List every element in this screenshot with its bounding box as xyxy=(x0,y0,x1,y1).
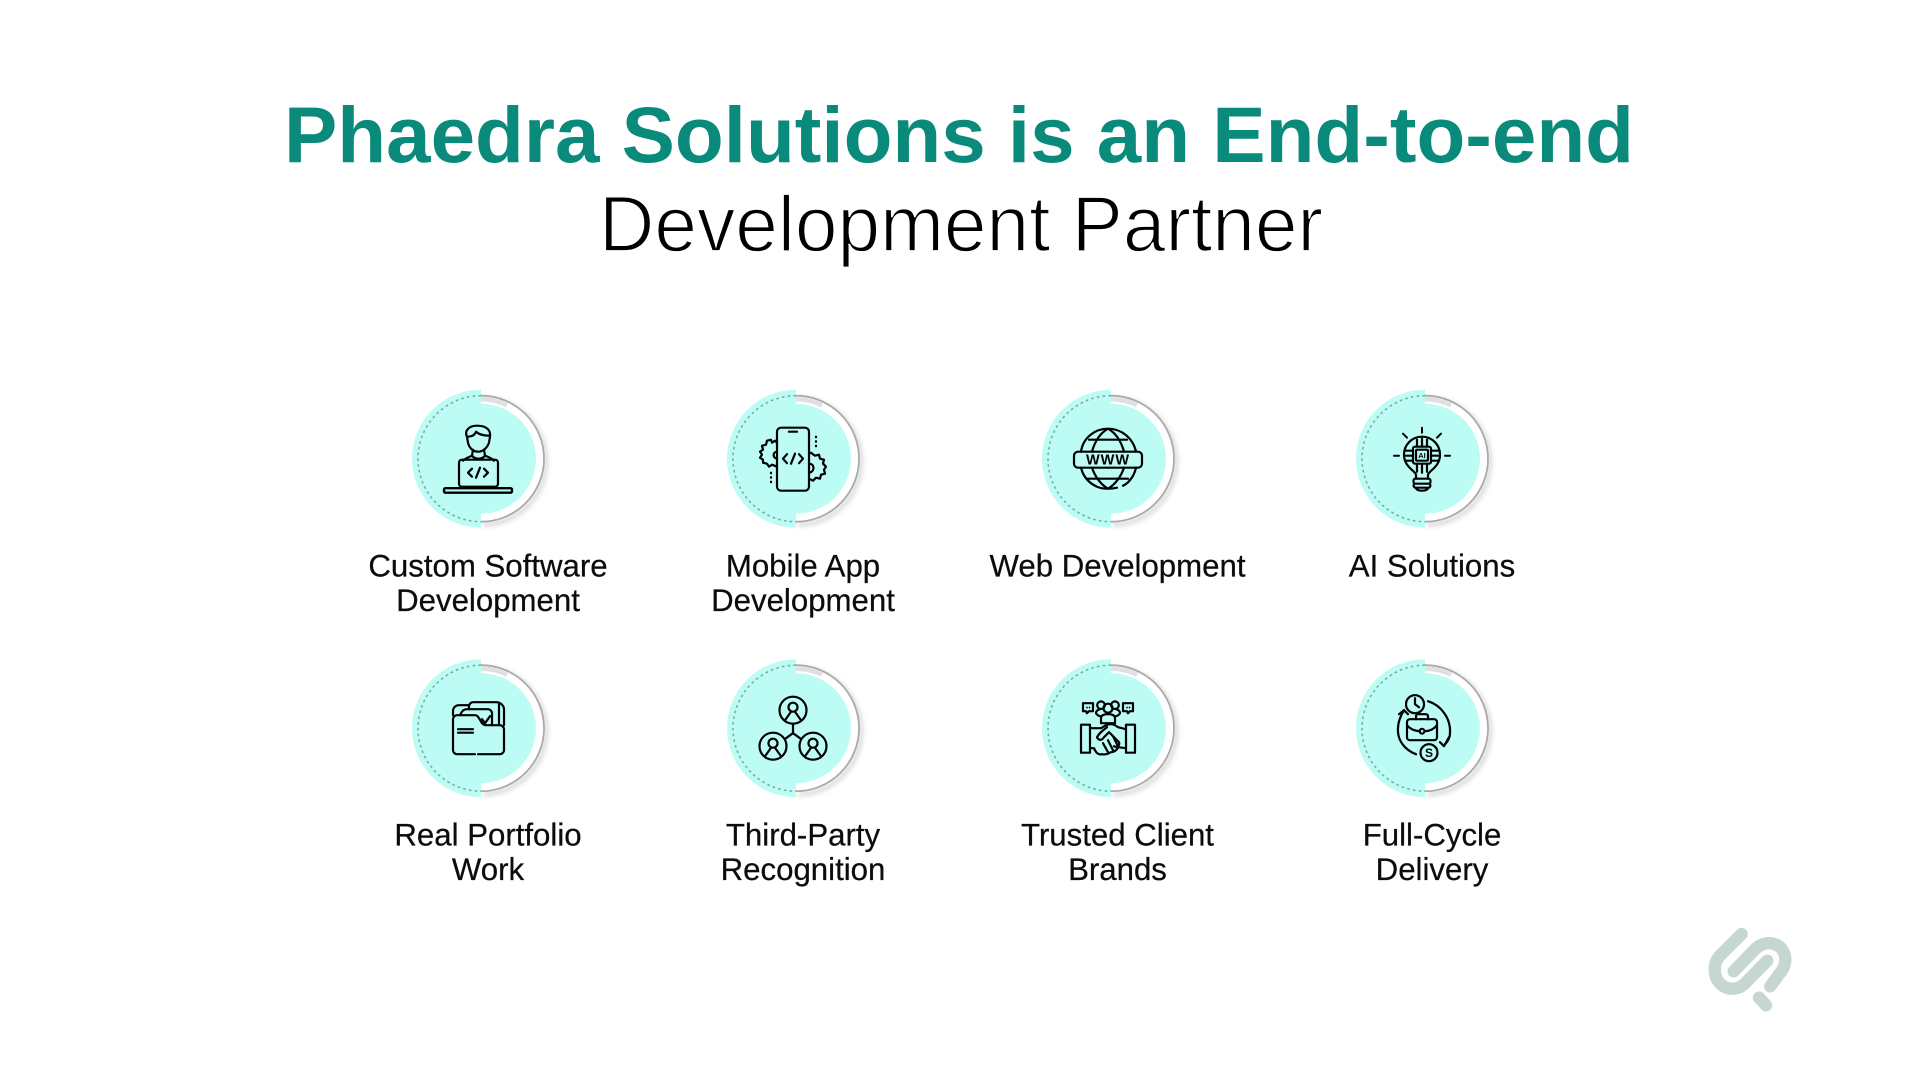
icon: globe www: WWW xyxy=(1086,453,1130,469)
icon: mobile phone with gears xyxy=(727,390,861,528)
label: Mobile App Development: Development xyxy=(711,583,895,618)
panel: Third-Party Recognition xyxy=(721,659,885,887)
icon: handshake with clients xyxy=(1042,659,1176,797)
icon: briefcase cycle with clock and dollar: S xyxy=(1425,746,1433,760)
panel: Mobile App Development xyxy=(711,390,895,618)
icon: three connected people xyxy=(727,659,861,797)
panel: AI Solutions xyxy=(1349,390,1515,584)
label: Trusted Client Brands: Brands xyxy=(1068,852,1167,887)
icon: developer at laptop xyxy=(412,390,546,528)
label: Real Portfolio Work: Real Portfolio xyxy=(394,818,582,852)
icon: light bulb with AI chip: AI xyxy=(1418,451,1426,460)
title xyxy=(284,90,1634,268)
panel: Real Portfolio Work xyxy=(394,659,582,887)
title: Development Partner xyxy=(599,179,1323,268)
label: Third-Party Recognition: Recognition xyxy=(721,852,885,887)
label: Trusted Client Brands: Trusted Client xyxy=(1021,818,1214,852)
label: Full-Cycle Delivery: Delivery xyxy=(1376,852,1489,887)
label: Web Development: Web Development xyxy=(990,548,1246,584)
label: Third-Party Recognition: Third-Party xyxy=(726,818,881,852)
label: Real Portfolio Work: Work xyxy=(452,852,525,887)
label: Full-Cycle Delivery: Full-Cycle xyxy=(1363,818,1501,852)
panel: Trusted Client Brands xyxy=(1021,659,1214,887)
panel: Custom Software Development xyxy=(368,390,608,618)
label: Mobile App Development: Mobile App xyxy=(726,548,880,584)
icon: globe www xyxy=(1042,390,1176,528)
icon: briefcase cycle with clock and dollar xyxy=(1356,659,1490,797)
panel: Full-Cycle Delivery xyxy=(1356,659,1501,887)
icon: light bulb with AI chip xyxy=(1356,390,1490,528)
title: Phaedra Solutions is an End-to-end xyxy=(284,90,1634,179)
panel: Web Development xyxy=(990,390,1246,584)
label: Custom Software Development: Custom Software xyxy=(368,548,608,584)
label: AI Solutions: AI Solutions xyxy=(1349,548,1515,584)
label: Custom Software Development: Development xyxy=(396,583,580,618)
icon: portfolio folder xyxy=(412,659,546,797)
icon: logo paperclip xyxy=(1715,934,1785,1005)
